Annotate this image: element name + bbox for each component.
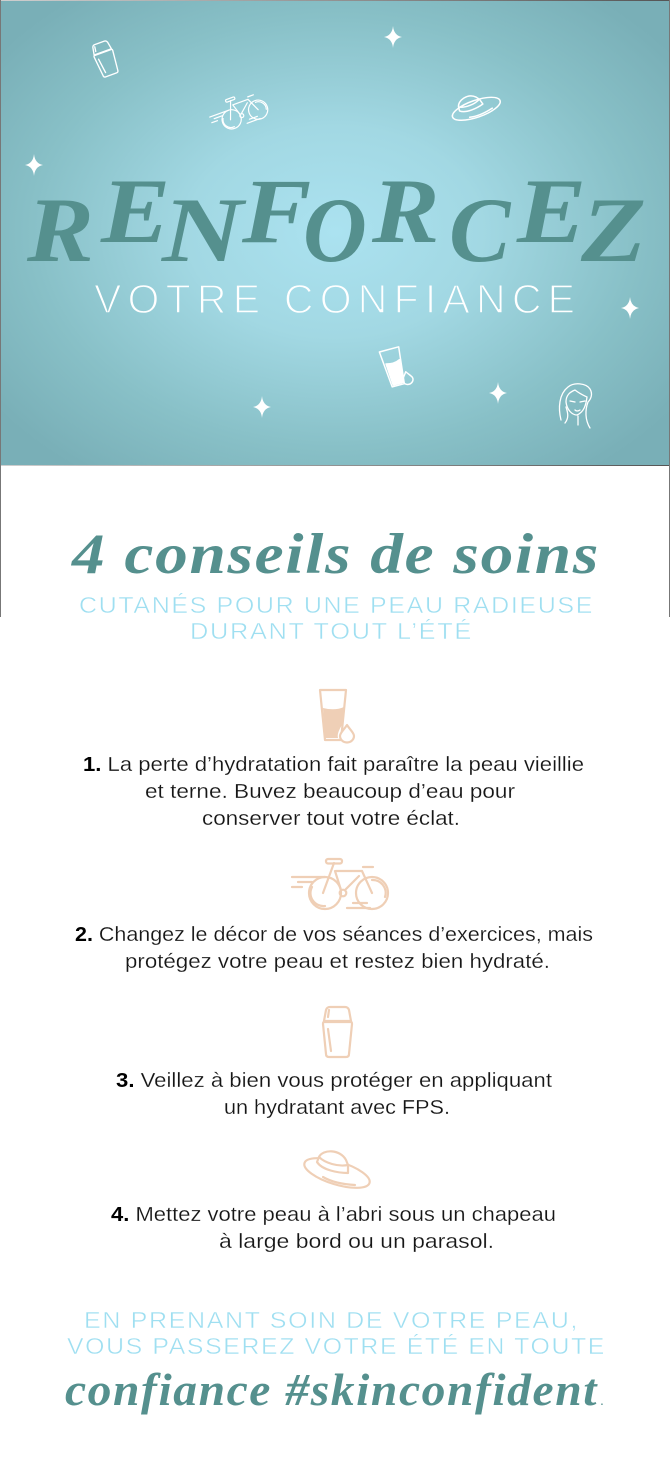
tip 1 text: 1. La perte d’hydratation fait paraître la peau vieillie [83,754,584,776]
heading: Renforcez: R [26,179,94,281]
icon: white sun hat [445,80,507,137]
tip 4 text: 4. Mettez votre peau à l’abri sous un chapeau [111,1204,556,1226]
heading: Renforcez: E [100,161,170,263]
heading: Renforcez [26,160,646,282]
tip 3 text: un hydratant avec FPS. [224,1097,450,1119]
closing hashtag: confiance #skinconfident [65,1364,598,1415]
icon: peach bicycle [292,859,388,909]
icon: peach sunscreen bottle [323,1007,352,1057]
icon: sparkle [621,297,639,319]
tip 2 text: protégez votre peau et restez bien hydraté. [125,951,550,973]
panel: hero banner [0,0,670,466]
subheading: cutanés: CUTANÉS POUR UNE PEAU RADIEUSE [79,592,594,618]
tip 1 text: conserver tout votre éclat. [202,808,460,830]
icon: sparkle [25,154,43,176]
subheading: cutanés [79,592,594,644]
closing statement [67,1307,606,1359]
heading: Renforcez: Z [580,179,646,281]
icon: white bicycle [206,87,270,135]
tip 1 text [83,754,584,830]
icon: white glass with drop [379,345,414,390]
icon: white face [559,384,591,428]
icon: peach glass with drop [320,690,354,742]
closing statement: EN PRENANT SOIN DE VOTRE PEAU, [84,1307,579,1333]
heading: 4 conseils de soins: 4 conseils de soins [71,523,600,586]
subheading: votre confiance: VOTRE CONFIANCE [94,276,575,322]
heading: Renforcez: O [303,179,367,281]
tip 3 text [116,1070,552,1119]
tip 2 text: 2. Changez le décor de vos séances d’exercices, mais [75,924,593,946]
tip 1 text: et terne. Buvez beaucoup d’eau pour [145,781,515,803]
tip 2 text [75,924,593,973]
heading: Renforcez: E [516,161,586,263]
icon: sparkle [489,382,507,404]
tip 4 text: à large bord ou un parasol. [219,1231,494,1253]
subheading: cutanés: DURANT TOUT L’ÉTÉ [190,618,473,644]
icon: sparkle [384,26,402,48]
tip 3 text: 3. Veillez à bien vous protéger en appliquant [116,1070,552,1092]
heading: Renforcez: F [241,161,311,263]
closing statement: VOUS PASSEREZ VOTRE ÉTÉ EN TOUTE [67,1333,606,1359]
icon: peach sun hat [301,1151,373,1194]
heading: Renforcez: N [161,180,247,282]
icon: sparkle [253,396,271,418]
tip 4 text [111,1204,556,1253]
icon: white sunscreen bottle [90,40,120,78]
page side borders [0,0,670,617]
heading: Renforcez: R [371,160,439,262]
heading: Renforcez: C [449,179,512,281]
closing hashtag: . [600,1392,604,1408]
